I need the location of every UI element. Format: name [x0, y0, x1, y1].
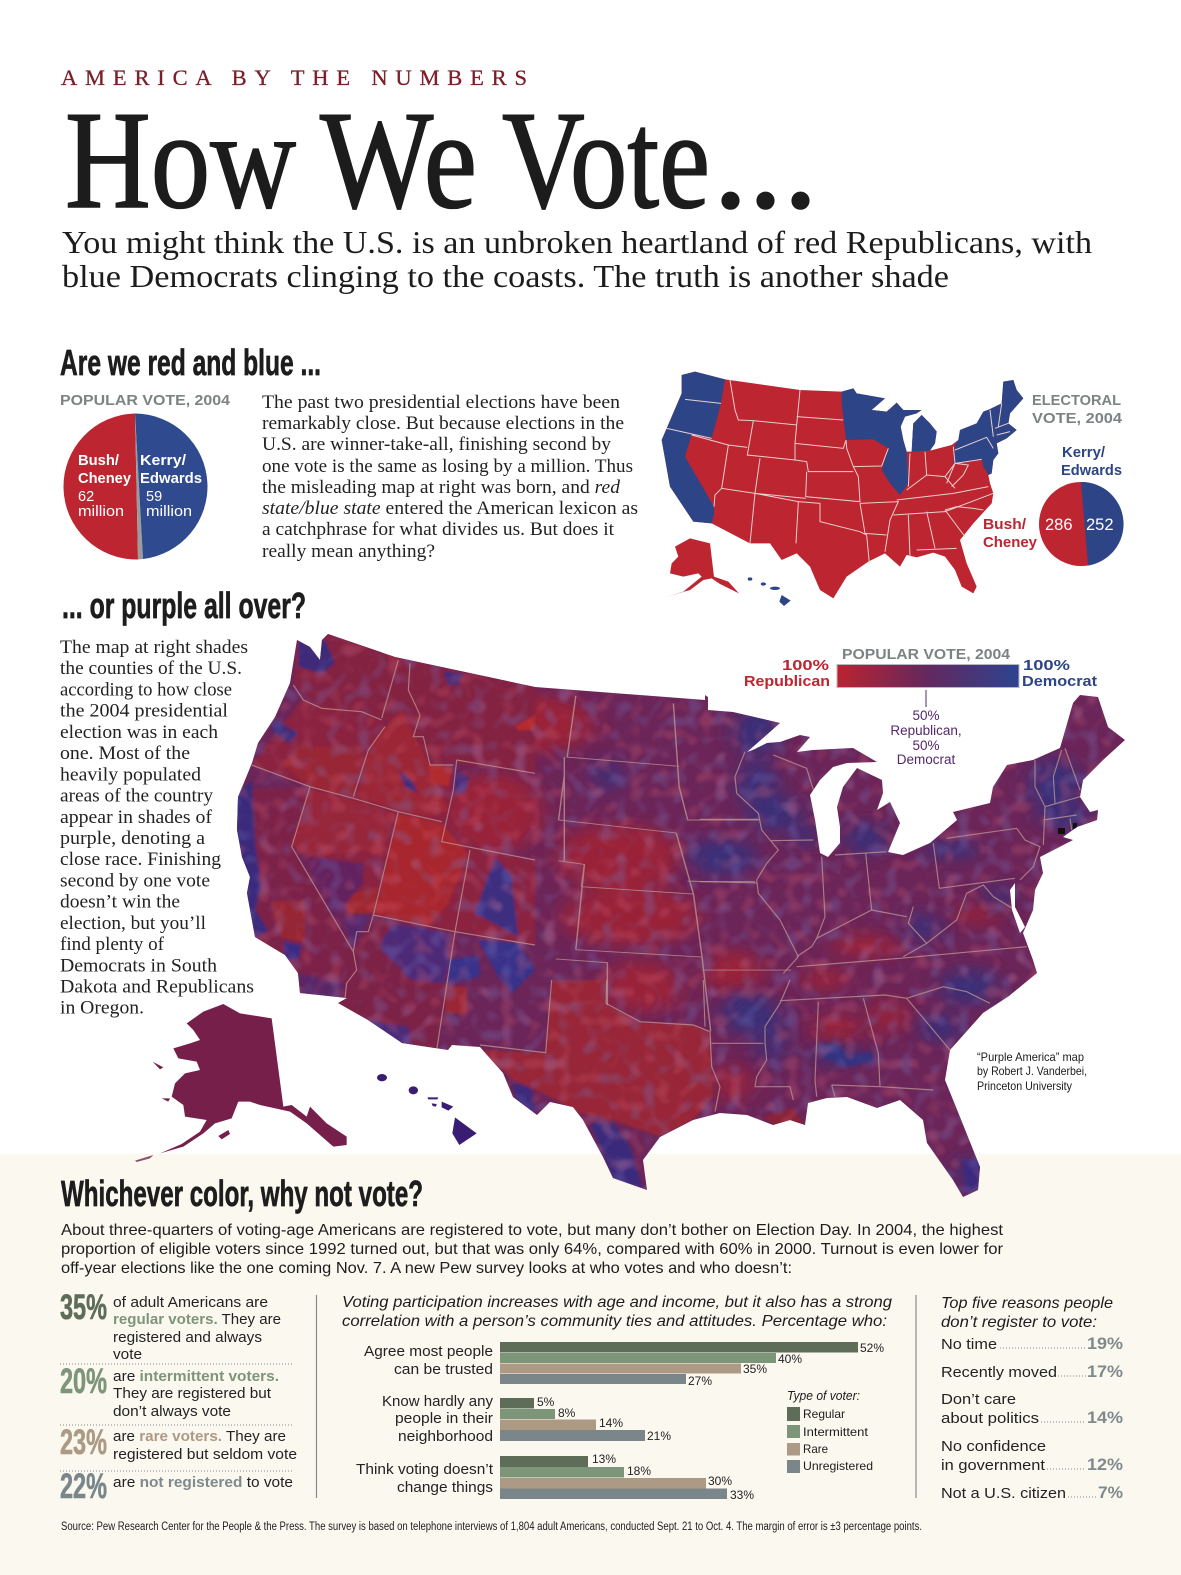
legend: type of voter — [787, 1389, 873, 1473]
legend: type of voter: Unregistered — [803, 1459, 873, 1473]
popular vote pie chart: 62 — [78, 489, 94, 505]
map legend: Democrat — [1022, 673, 1097, 690]
body text: purple: Democrats in South — [60, 956, 217, 976]
body text: purple: find plenty of — [60, 935, 165, 955]
list: top five reasons: Don’t care — [941, 1391, 1016, 1408]
body text: purple: Dakota and Republicans — [60, 978, 254, 998]
body text: purple: doesn’t win the — [60, 893, 180, 913]
stat: intermittent voters: They are registered but — [113, 1385, 272, 1402]
body text: purple: election was in each — [60, 723, 218, 743]
bars: voting change: 30% — [708, 1474, 732, 1488]
map credit — [977, 1050, 1087, 1093]
map legend: 100% — [1023, 657, 1070, 674]
subtitle: You might think the U.S. is an unbroken heartland of red Republicans, with — [62, 224, 1092, 260]
body text: purple: close race. Finishing — [60, 850, 221, 870]
bars: trust: 35% — [743, 1362, 767, 1376]
popular vote pie chart: 59 — [146, 489, 162, 505]
intro paragraph: proportion of eligible voters since 1992 turned out, but that was only 64%, compared with 60% in 2000. Turnout is even lower for — [61, 1241, 1004, 1258]
bars: trust: Agree most people — [364, 1343, 493, 1360]
body text: purple: heavily populated — [60, 765, 202, 785]
map legend — [744, 647, 1097, 767]
body text: purple: election, but you’ll — [60, 914, 206, 934]
bars: voting change: 18% — [627, 1464, 651, 1478]
Alaska and Hawaii insets — [135, 1004, 477, 1162]
title: ... — [713, 83, 818, 238]
electoral pie chart: 286 — [1045, 516, 1073, 534]
map legend: Republican, — [890, 723, 962, 738]
body text: red and blue — [262, 393, 638, 562]
bars: neighborhood: 5% — [537, 1395, 555, 1409]
list: top five reasons: 7% — [1098, 1483, 1123, 1502]
body text: red and blue: state/blue state entered the American lexicon as — [262, 499, 638, 519]
list: top five reasons: No time — [941, 1336, 997, 1353]
list: top five reasons: Recently moved — [941, 1364, 1057, 1381]
bars: trust: can be trusted — [394, 1361, 493, 1378]
heading: why not vote: Whichever color, why not vote? — [61, 1173, 423, 1214]
list: top five reasons: 19% — [1087, 1334, 1123, 1353]
kicker: AMERICA BY THE NUMBERS — [61, 65, 527, 90]
electoral pie chart: Cheney — [983, 534, 1038, 551]
popular vote pie chart — [60, 392, 231, 560]
bars: trust: 40% — [778, 1352, 802, 1366]
bar chart: voting participation — [342, 1294, 892, 1502]
stat: not registered: 22% — [60, 1467, 107, 1506]
stat: regular voters: registered and always — [113, 1329, 262, 1346]
legend: type of voter: Type of voter: — [787, 1389, 860, 1403]
stat: regular voters: regular voters. They are — [113, 1311, 281, 1328]
popular vote pie chart: Cheney — [78, 471, 131, 487]
body text: purple: The map at right shades — [60, 638, 248, 658]
body text: purple: purple, denoting a — [60, 829, 205, 849]
list: top five reasons: Top five reasons people — [941, 1295, 1113, 1312]
bars: neighborhood: neighborhood — [398, 1428, 493, 1445]
body text: purple: one. Most of the — [60, 744, 190, 764]
popular vote pie chart: Edwards — [140, 471, 202, 487]
body text: purple: in Oregon. — [60, 999, 144, 1019]
body text: purple: areas of the country — [60, 786, 214, 806]
state lines — [252, 660, 1080, 1112]
body text: red and blue: a catchphrase for what divides us. But does it — [262, 520, 615, 540]
bars: neighborhood: 8% — [558, 1406, 576, 1420]
electoral map: states — [662, 372, 1023, 606]
popular vote pie chart: million — [78, 504, 124, 520]
body text: purple: according to how close — [60, 680, 232, 700]
legend: type of voter: Regular — [803, 1407, 845, 1421]
list: top five reasons — [941, 1295, 1123, 1502]
stat: rare voters — [60, 1423, 297, 1463]
stat: regular voters: of adult Americans are — [113, 1294, 268, 1311]
stat: rare voters: registered but seldom vote — [113, 1446, 297, 1463]
title — [65, 83, 818, 238]
bars: voting change: change things — [397, 1479, 493, 1496]
title: We — [320, 83, 477, 238]
bars: neighborhood: people in their — [395, 1410, 493, 1427]
body text: purple: the counties of the U.S. — [60, 659, 242, 679]
source note: Source: Pew Research Center for the People & the Press. The survey is based on telephone interviews of 1,804 adult Americans, conducted Sept. 21 to Oct. 4. The margin of error is ±3 percentage points. — [61, 1521, 922, 1533]
electoral pie chart: Bush/ — [983, 516, 1027, 533]
map credit: “Purple America” map — [977, 1050, 1084, 1064]
list: top five reasons: in government — [941, 1457, 1046, 1474]
bars: neighborhood: 14% — [599, 1416, 623, 1430]
heading: purple all over: ... or purple all over? — [62, 585, 306, 626]
list: top five reasons: Not a U.S. citizen — [941, 1485, 1066, 1502]
stat: intermittent voters — [60, 1362, 279, 1420]
popular vote pie chart: million — [146, 504, 192, 520]
bars: neighborhood — [382, 1393, 671, 1445]
map credit: by Robert J. Vanderbei, — [977, 1064, 1087, 1078]
icon: Alaska — [667, 538, 739, 597]
body text: red and blue: the misleading map at right was born, and red — [262, 478, 621, 498]
intro paragraph: About three-quarters of voting-age Americans are registered to vote, but many don’t bother on Election Day. In 2004, the highest — [61, 1222, 1004, 1239]
chart heading — [342, 1294, 892, 1330]
popular vote pie chart: Bush/ — [78, 453, 119, 469]
popular vote pie chart: POPULAR VOTE, 2004 — [60, 392, 231, 409]
bars: trust: 52% — [860, 1341, 884, 1355]
stat: not registered: are not registered to vote — [113, 1474, 293, 1491]
bars: voting change: 33% — [730, 1488, 754, 1502]
map legend: Republican — [744, 673, 830, 690]
stat: regular voters — [60, 1288, 281, 1363]
electoral vote label: VOTE, 2004 — [1032, 410, 1123, 427]
stat: intermittent voters: 20% — [60, 1362, 107, 1401]
bars: neighborhood: 21% — [647, 1429, 671, 1443]
bars: trust: 27% — [688, 1374, 712, 1388]
electoral pie chart: 252 — [1086, 516, 1114, 534]
electoral vote label — [1032, 392, 1123, 427]
stat: regular voters: 35% — [60, 1288, 107, 1327]
body text: purple: the 2004 presidential — [60, 702, 228, 722]
stat: rare voters: are rare voters. They are — [113, 1428, 286, 1445]
body text: red and blue: U.S. are winner-take-all, finishing second by — [262, 435, 612, 455]
body text: purple — [60, 638, 254, 1019]
stat: intermittent voters: don’t always vote — [113, 1403, 231, 1420]
icon: Hawaii — [748, 577, 791, 606]
popular vote pie chart: Kerry/ — [140, 453, 186, 469]
subtitle — [62, 224, 1092, 294]
legend: type of voter: Intermittent — [803, 1425, 869, 1439]
bars: voting change — [356, 1452, 754, 1502]
stat: rare voters: 23% — [60, 1423, 107, 1462]
body text: red and blue: The past two presidential elections have been — [262, 393, 620, 413]
electoral vote label: ELECTORAL — [1032, 392, 1121, 409]
map legend: 100% — [782, 657, 829, 674]
list: top five reasons: 17% — [1087, 1362, 1123, 1381]
region: southern counties — [480, 980, 980, 1193]
electoral pie chart: Kerry/ — [1062, 444, 1106, 461]
map legend: 50% — [912, 738, 940, 753]
panel: cream background — [0, 1154, 1181, 1575]
stat: intermittent voters: are intermittent voters. — [113, 1368, 279, 1385]
bars: voting change: 13% — [592, 1452, 616, 1466]
body text: red and blue: really mean anything? — [262, 542, 435, 562]
body text: purple: second by one vote — [60, 871, 210, 891]
chart heading: correlation with a person’s community ties and attitudes. Percentage who: — [342, 1313, 887, 1330]
Chesapeake Bay — [1010, 883, 1025, 933]
electoral pie chart — [983, 444, 1124, 566]
list: top five reasons: No confidence — [941, 1438, 1046, 1455]
voter type stats — [60, 1288, 297, 1506]
title: How — [65, 83, 296, 238]
bars: voting change: Think voting doesn’t — [356, 1461, 494, 1478]
subtitle: blue Democrats clinging to the coasts. The truth is another shade — [62, 258, 949, 294]
map legend: Democrat — [897, 752, 956, 767]
purple county map — [230, 620, 1140, 1210]
body text: red and blue: one vote is the same as losing by a million. Thus — [262, 457, 633, 477]
stat: not registered — [60, 1467, 293, 1506]
map credit: Princeton University — [977, 1079, 1072, 1093]
map legend: 50% — [912, 708, 940, 723]
title: Vote — [502, 83, 710, 238]
body text: red and blue: remarkably close. But because elections in the — [262, 414, 624, 434]
list: top five reasons: 14% — [1087, 1408, 1123, 1427]
list: top five reasons: don’t register to vote: — [941, 1314, 1097, 1331]
intro paragraph — [61, 1222, 1004, 1277]
map legend: POPULAR VOTE, 2004 — [842, 647, 1010, 663]
chart heading: Voting participation increases with age and income, but it also has a strong — [342, 1294, 892, 1311]
list: top five reasons: about politics — [941, 1410, 1039, 1427]
stat: regular voters: vote — [113, 1346, 142, 1363]
bars: neighborhood: Know hardly any — [382, 1393, 493, 1410]
heading: are we red and blue: Are we red and blue ... — [60, 342, 321, 383]
intro paragraph: off-year elections like the one coming Nov. 7. A new Pew survey looks at who votes and who doesn’t: — [61, 1260, 792, 1277]
region: western counties — [235, 633, 535, 1050]
bars: trust — [364, 1341, 884, 1388]
electoral pie chart: Edwards — [1061, 462, 1122, 479]
body text: purple: appear in shades of — [60, 808, 213, 828]
list: top five reasons: 12% — [1087, 1455, 1123, 1474]
legend: type of voter: Rare — [803, 1442, 828, 1456]
